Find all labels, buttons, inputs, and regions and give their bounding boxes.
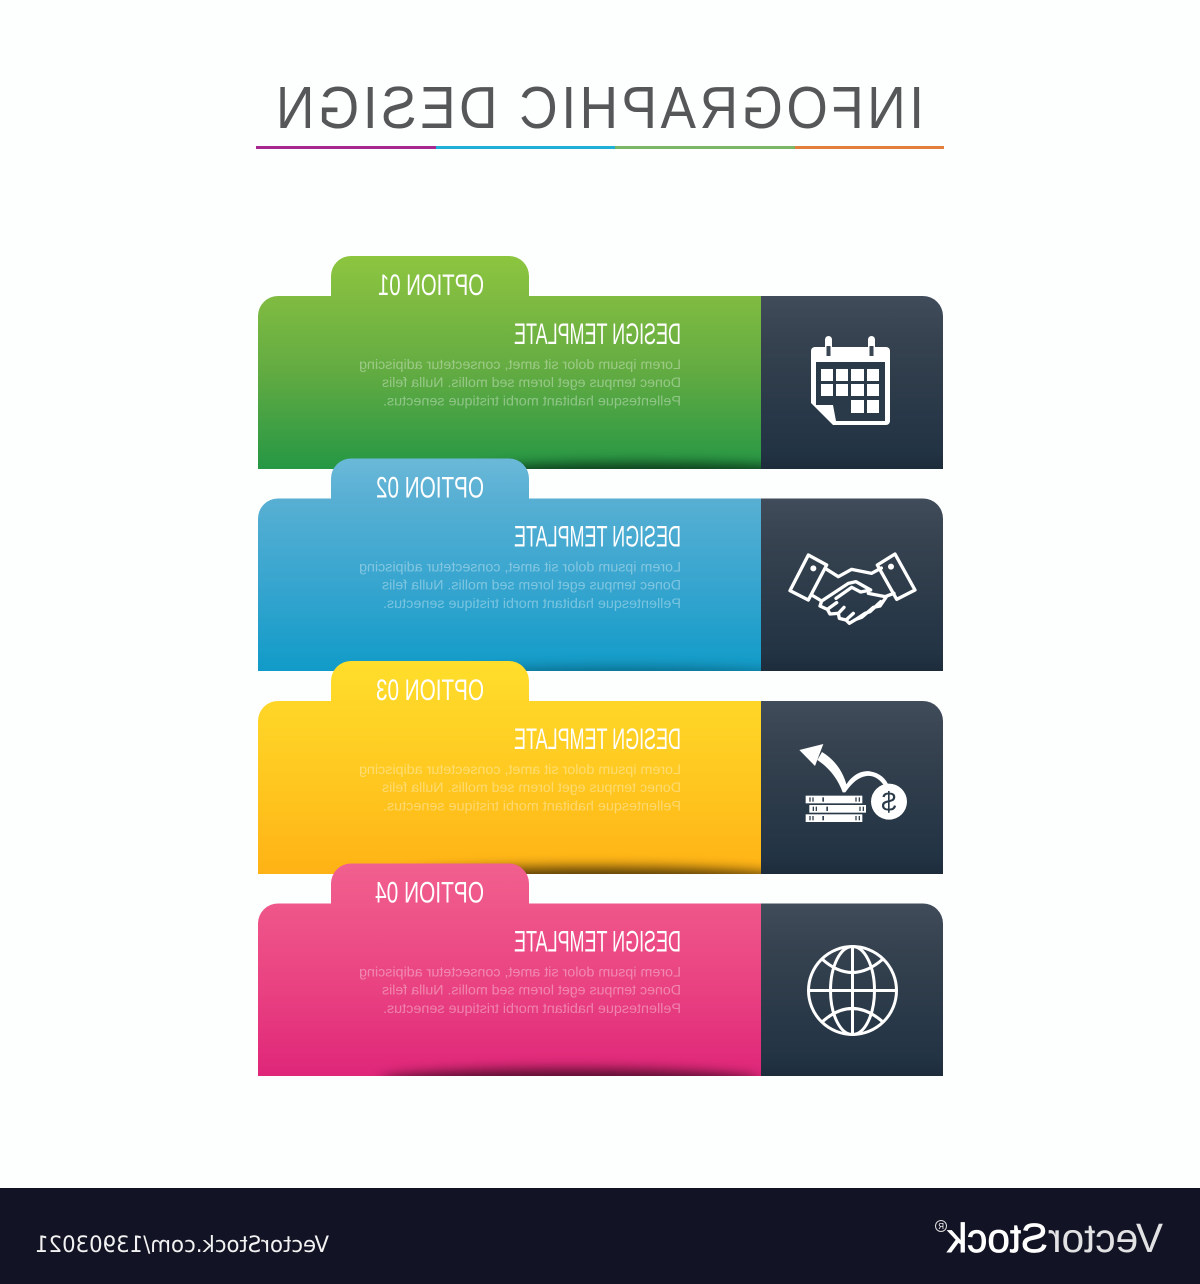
dark icon panel: [761, 296, 943, 469]
footer logo: Vector: [1048, 1215, 1163, 1261]
body text: [359, 964, 681, 1016]
blue card with tab: [258, 458, 761, 671]
card shadow: [416, 858, 761, 874]
footer logo: Stock: [947, 1215, 1048, 1261]
body text: Lorem ipsum dolor sit amet, consectetur adipiscing: [359, 761, 681, 777]
body text: Pellentesque habitant morbi tristique senectus.: [383, 392, 681, 408]
body text: Pellentesque habitant morbi tristique senectus.: [383, 595, 681, 611]
body text: Donec tempus eget lorem sed mollis. Nulla felis: [382, 779, 681, 795]
card shadow: [378, 1060, 761, 1076]
tab label: OPTION 04: [375, 876, 484, 910]
body text: Pellentesque habitant morbi tristique senectus.: [383, 1000, 681, 1016]
footer logo: R: [938, 1222, 944, 1231]
icon: calendar: [811, 336, 890, 425]
icon: coins and arrow: $: [881, 787, 896, 817]
title underline in four colours: [256, 146, 944, 149]
body text: Lorem ipsum dolor sit amet, consectetur adipiscing: [359, 558, 681, 574]
footer logo: [936, 1215, 1163, 1261]
heading: DESIGN TEMPLATE: [514, 926, 681, 958]
panel: option 04: [258, 864, 943, 1093]
panel: option 03: [258, 661, 943, 891]
card shadow: [518, 660, 761, 671]
icon: globe: [808, 946, 896, 1034]
body text: Donec tempus eget lorem sed mollis. Nulla felis: [382, 576, 681, 592]
dark icon panel: [761, 904, 943, 1076]
tab label: OPTION 03: [376, 674, 484, 707]
body text: [359, 356, 681, 408]
footer bar: [0, 1188, 1200, 1284]
pink card with tab: [258, 864, 761, 1076]
body text: [359, 558, 681, 611]
footer url text: VectorStock.com/13903021: [35, 1233, 329, 1258]
heading: DESIGN TEMPLATE: [514, 723, 681, 756]
body text: Donec tempus eget lorem sed mollis. Nulla felis: [382, 982, 681, 998]
body text: [359, 761, 681, 814]
card shadow: [513, 455, 761, 469]
heading: DESIGN TEMPLATE: [514, 520, 681, 554]
tab label: OPTION 02: [376, 472, 484, 504]
panel: option 02: [258, 458, 943, 685]
dark icon panel: [761, 701, 943, 874]
body text: Lorem ipsum dolor sit amet, consectetur adipiscing: [359, 964, 681, 980]
title: INFOGRAPHIC DESIGN: [276, 74, 924, 141]
green card with tab: [258, 256, 761, 469]
dark icon panel: [761, 498, 943, 671]
body text: Pellentesque habitant morbi tristique senectus.: [383, 798, 681, 814]
body text: Lorem ipsum dolor sit amet, consectetur adipiscing: [359, 356, 681, 372]
yellow card with tab: [258, 661, 761, 874]
icon: handshake: [790, 554, 915, 623]
body text: Donec tempus eget lorem sed mollis. Nulla felis: [382, 374, 681, 390]
tab label: OPTION 01: [378, 269, 484, 302]
icon: coins and arrow: [799, 744, 907, 822]
panel: option 01: [258, 256, 943, 483]
heading: DESIGN TEMPLATE: [514, 318, 681, 351]
